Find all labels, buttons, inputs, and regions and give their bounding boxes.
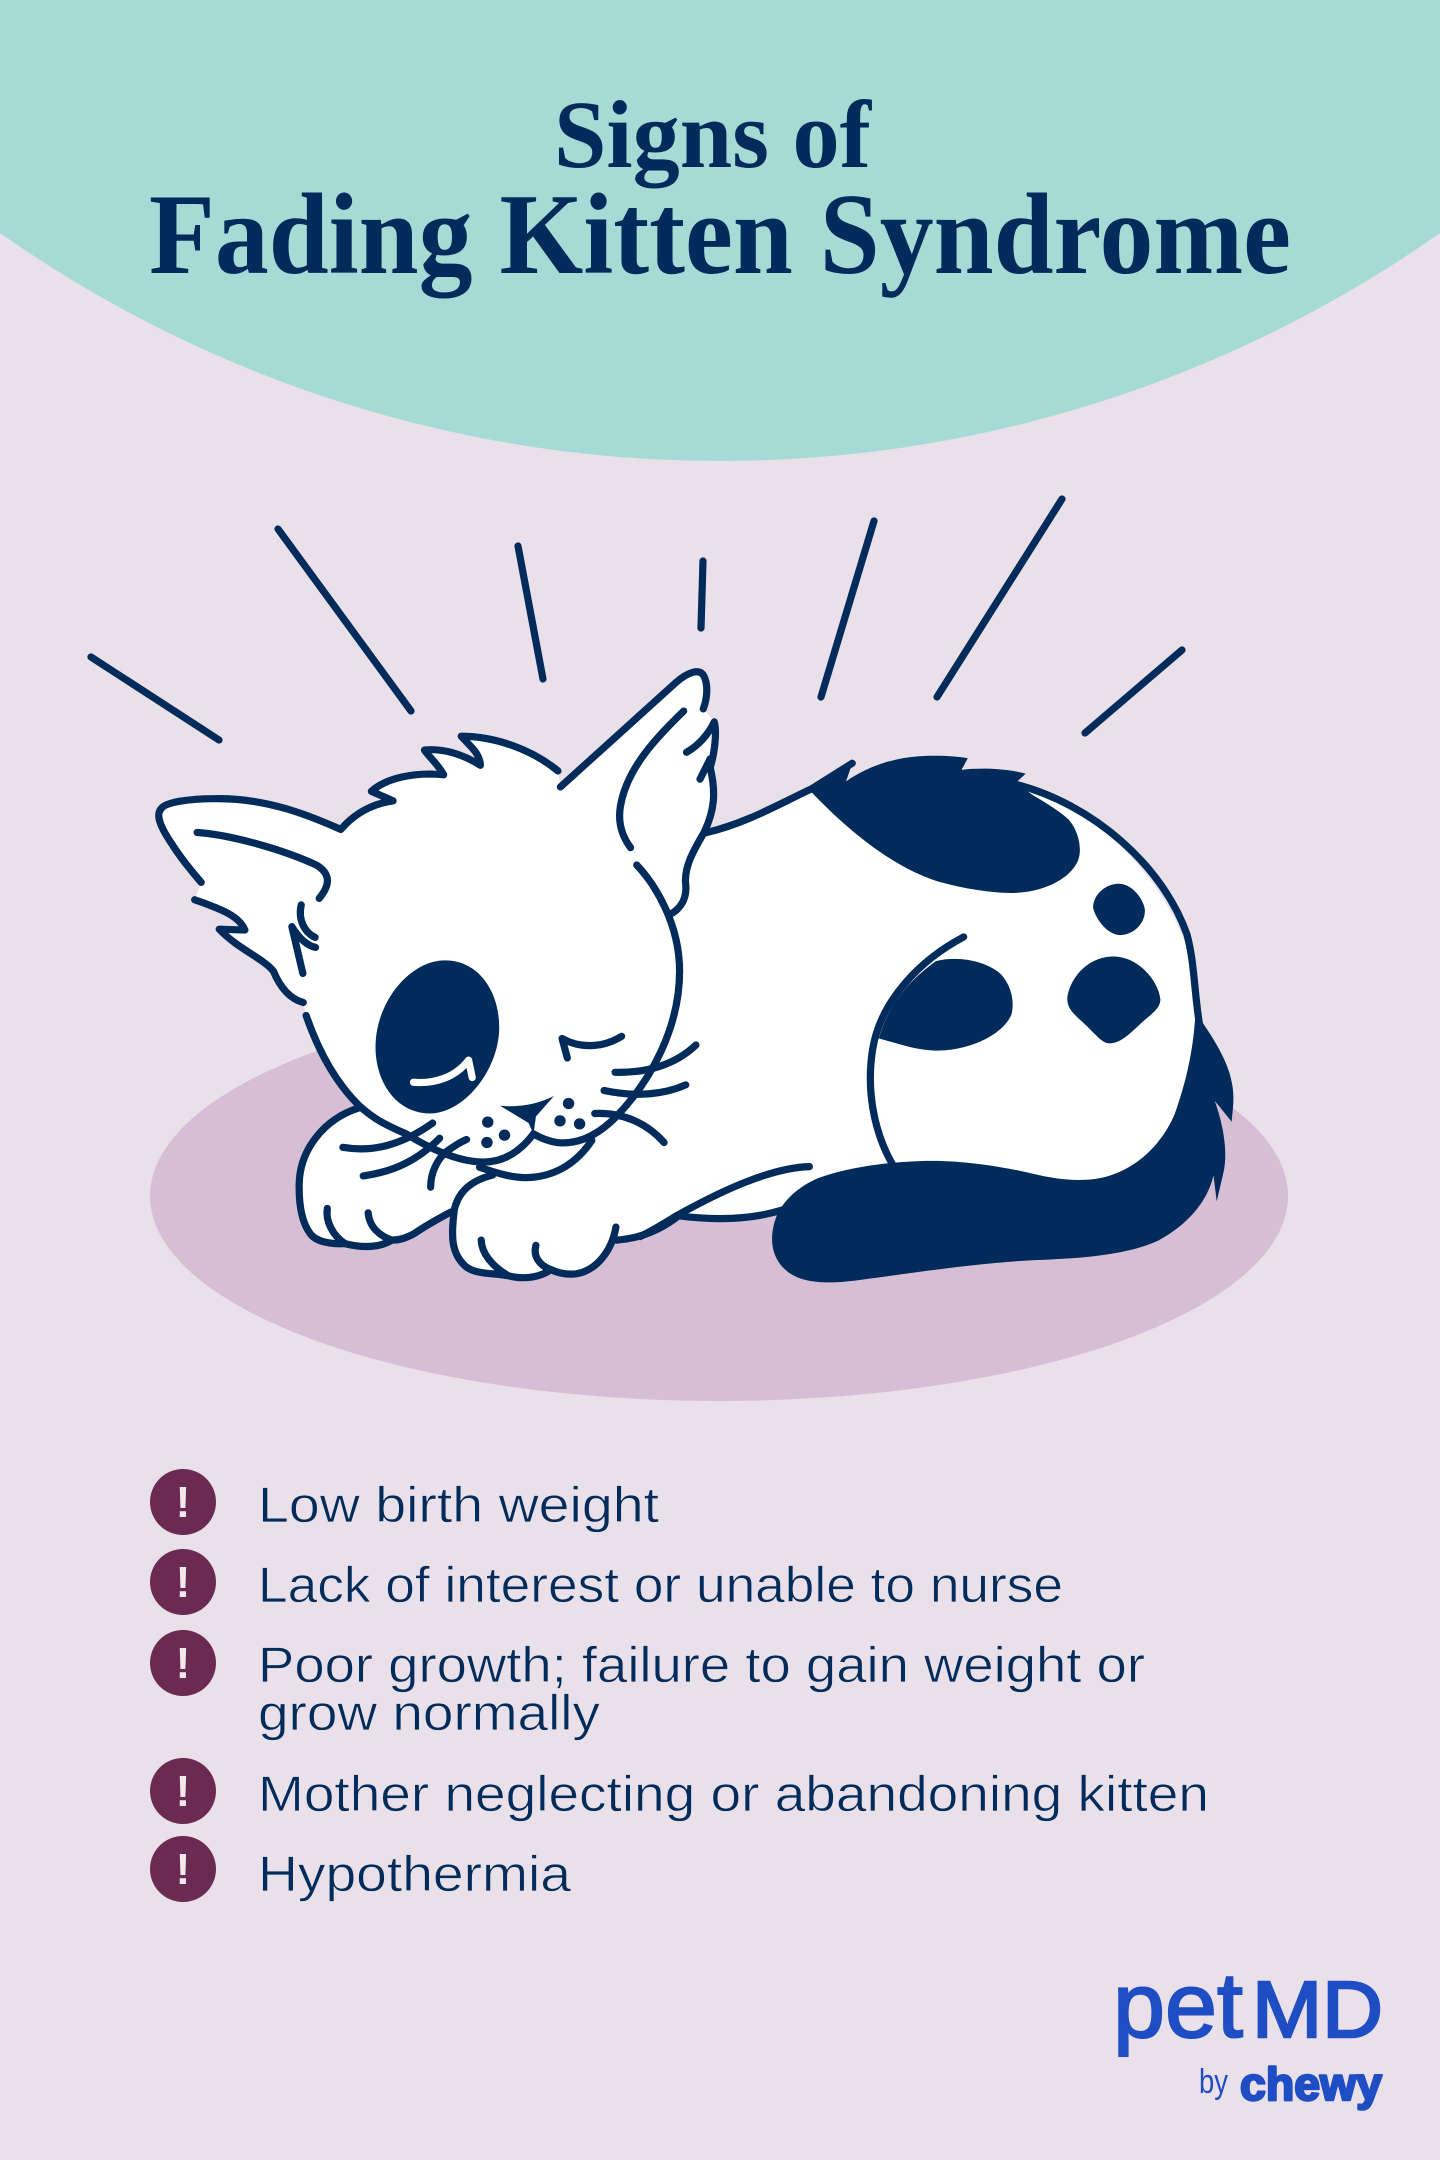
sign 3 (150, 1630, 1145, 1741)
sign 3: Poor growth; failure to gain weight or (258, 1637, 1145, 1693)
kitten back and belly outlines (640, 763, 852, 1237)
kitten body with spots and tail (620, 756, 1233, 1282)
title (149, 81, 1291, 299)
petMD by chewy logo (1113, 1955, 1383, 2110)
radiating lines above kitten (91, 499, 1182, 740)
sign 2: ! (176, 1558, 190, 1607)
sign 4: Mother neglecting or abandoning kitten (258, 1766, 1209, 1822)
list of signs (150, 1469, 1209, 1902)
sign 3: grow normally (258, 1685, 600, 1741)
title: Fading Kitten Syndrome (149, 171, 1291, 299)
sign 1 (150, 1469, 659, 1535)
sign 1: Low birth weight (258, 1477, 659, 1533)
sign 1: ! (176, 1478, 190, 1527)
petMD by chewy logo: MD (1252, 1965, 1383, 2054)
sign 3: ! (176, 1639, 190, 1688)
sign 5 (150, 1836, 571, 1902)
sign 5: Hypothermia (258, 1846, 571, 1902)
kitten head and paws (159, 672, 740, 1278)
sign 4 (150, 1758, 1209, 1824)
title: Signs of (554, 81, 872, 188)
sign 2: Lack of interest or unable to nurse (258, 1557, 1063, 1613)
sign 5: ! (176, 1845, 190, 1894)
header teal arc (0, 0, 1440, 461)
shadow ellipse under kitten (150, 991, 1288, 1401)
petMD by chewy logo: by (1199, 2063, 1228, 2101)
petMD by chewy logo: pet (1113, 1955, 1243, 2057)
kitten illustration (159, 672, 1233, 1282)
petMD by chewy logo: chewy (1240, 2058, 1382, 2110)
sign 4: ! (176, 1767, 190, 1816)
